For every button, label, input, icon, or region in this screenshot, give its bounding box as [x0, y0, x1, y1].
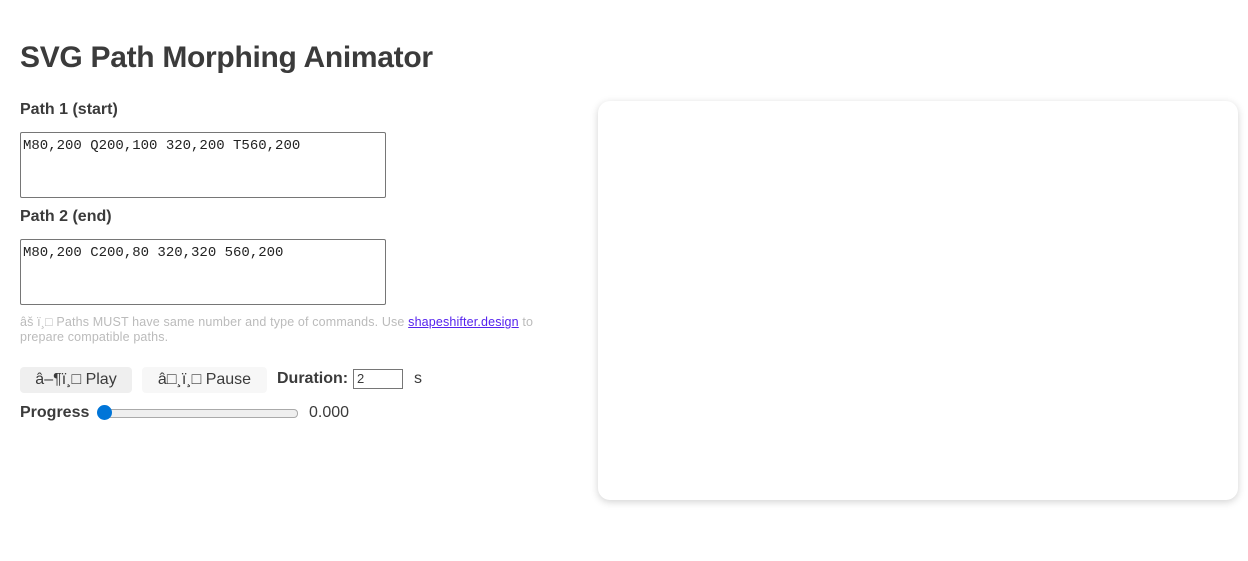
duration control	[277, 369, 422, 389]
progress slider: 0.000	[309, 404, 349, 421]
label: path 2: Path 2 (end)	[20, 208, 112, 225]
textarea: path 2	[20, 239, 386, 305]
duration control: Duration:	[277, 370, 348, 387]
title: SVG Path Morphing Animator	[20, 41, 433, 74]
hint text: âš ï¸□ Paths MUST have same number and type of commands. Use shapeshifter.design to prepare compatible paths.	[20, 315, 533, 344]
duration control: 2	[357, 371, 364, 386]
textarea: path 1: M80,200 Q200,100 320,200 T560,200	[23, 138, 300, 154]
panel: preview canvas	[598, 101, 1238, 500]
label: path 1: Path 1 (start)	[20, 101, 118, 118]
progress slider	[20, 404, 349, 421]
button: play	[20, 367, 132, 393]
progress slider: Progress	[20, 404, 89, 421]
button: pause	[142, 367, 267, 393]
textarea: path 1	[20, 132, 386, 198]
textarea: path 2: M80,200 C200,80 320,320 560,200	[23, 245, 283, 261]
duration control: s	[414, 370, 422, 387]
button: pause: â□¸ï¸□ Pause	[158, 371, 251, 388]
button: play: â–¶ï¸□ Play	[35, 371, 117, 388]
